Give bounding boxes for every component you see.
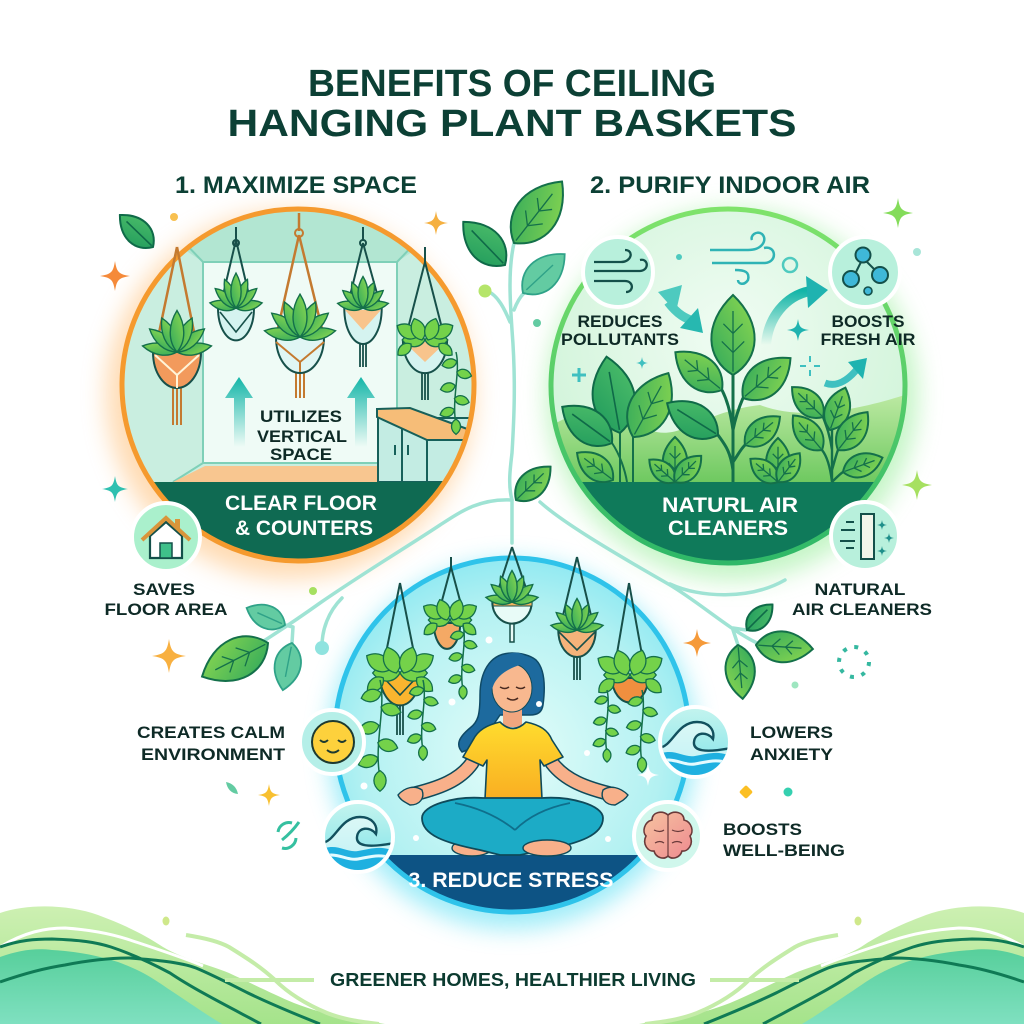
label fresh air: BOOSTS <box>832 312 904 331</box>
banner text: CLEANERS <box>668 517 788 540</box>
footer wave right <box>639 906 1024 1024</box>
creates calm label: CREATES CALM <box>137 723 285 742</box>
left plant group <box>552 353 708 490</box>
natural air cleaners label <box>792 580 932 619</box>
icon: brain <box>634 802 702 870</box>
vertical space label: VERTICAL <box>257 427 347 446</box>
saves floor area label: FLOOR AREA <box>104 600 228 619</box>
vertical space label: UTILIZES <box>260 407 342 426</box>
creates calm label <box>137 723 286 764</box>
arrows up <box>225 377 375 447</box>
small air sparkles <box>572 319 820 382</box>
panel: maximize space <box>110 172 490 572</box>
room scene <box>124 212 472 558</box>
icon: calm face <box>300 710 364 774</box>
heading 2: 2. PURIFY INDOOR AIR <box>590 172 870 199</box>
label fresh air <box>820 312 916 349</box>
saves floor area label: SAVES <box>133 580 195 599</box>
hanging plant 3 <box>263 213 337 398</box>
boosts well-being label: WELL-BEING <box>723 841 845 860</box>
main plant <box>659 295 801 482</box>
hanging plants <box>356 547 666 791</box>
label pollutants <box>561 312 679 349</box>
air flow arrows <box>658 276 867 384</box>
banner text: & COUNTERS <box>235 517 373 540</box>
icon: wave right <box>659 707 731 782</box>
banner text: NATURL AIR <box>662 494 798 517</box>
banner text: CLEAR FLOOR <box>225 492 377 515</box>
lowers anxiety label: LOWERS <box>750 723 833 742</box>
title <box>228 63 796 145</box>
vertical space label <box>257 407 347 464</box>
icon: wave left <box>322 802 394 877</box>
label pollutants: POLLUTANTS <box>561 330 679 349</box>
decorative sparkles and dots <box>100 198 932 848</box>
tree leaves <box>193 169 814 700</box>
wind swirl <box>676 233 797 284</box>
footer wave left <box>0 906 385 1024</box>
banner text <box>225 492 377 540</box>
panel: reduce stress <box>330 547 694 915</box>
icon: fresh air molecules <box>830 237 900 307</box>
hanging plant 1 <box>142 247 212 425</box>
icon: air filter <box>831 502 899 570</box>
hanging plant 2 <box>209 227 263 340</box>
woman meditating <box>398 653 628 856</box>
label fresh air: FRESH AIR <box>820 330 916 349</box>
boosts well-being label <box>723 820 845 860</box>
blue ring <box>335 558 689 912</box>
hanging plant 4 <box>337 227 389 367</box>
icon: pollutants <box>583 237 653 307</box>
lowers anxiety label: ANXIETY <box>750 745 834 764</box>
footer text: GREENER HOMES, HEALTHIER LIVING <box>330 970 696 990</box>
natural air cleaners label: AIR CLEANERS <box>792 600 932 619</box>
natural air cleaners label: NATURAL <box>814 580 906 599</box>
banner text <box>662 494 798 540</box>
title: BENEFITS OF CEILING <box>308 63 716 105</box>
central branches <box>225 243 785 665</box>
right plant group <box>744 379 886 489</box>
small white sparkles <box>360 636 659 842</box>
hanging plant 5 <box>394 247 473 434</box>
heading 1: 1. MAXIMIZE SPACE <box>175 172 417 199</box>
green ring <box>551 209 905 563</box>
air scene background <box>554 213 902 560</box>
creates calm label: ENVIRONMENT <box>141 745 286 764</box>
vertical space label: SPACE <box>270 445 332 464</box>
lowers anxiety label <box>750 723 834 764</box>
icon: house <box>132 503 200 571</box>
panel: purify indoor air <box>545 172 916 575</box>
orange ring <box>122 209 474 561</box>
stress scene background <box>330 555 694 915</box>
title: HANGING PLANT BASKETS <box>228 103 796 145</box>
soft glows behind panels <box>106 209 918 929</box>
label pollutants: REDUCES <box>578 312 662 331</box>
saves floor area label <box>104 580 228 619</box>
boosts well-being label: BOOSTS <box>723 820 802 839</box>
banner text: 3. REDUCE STRESS <box>408 869 614 892</box>
